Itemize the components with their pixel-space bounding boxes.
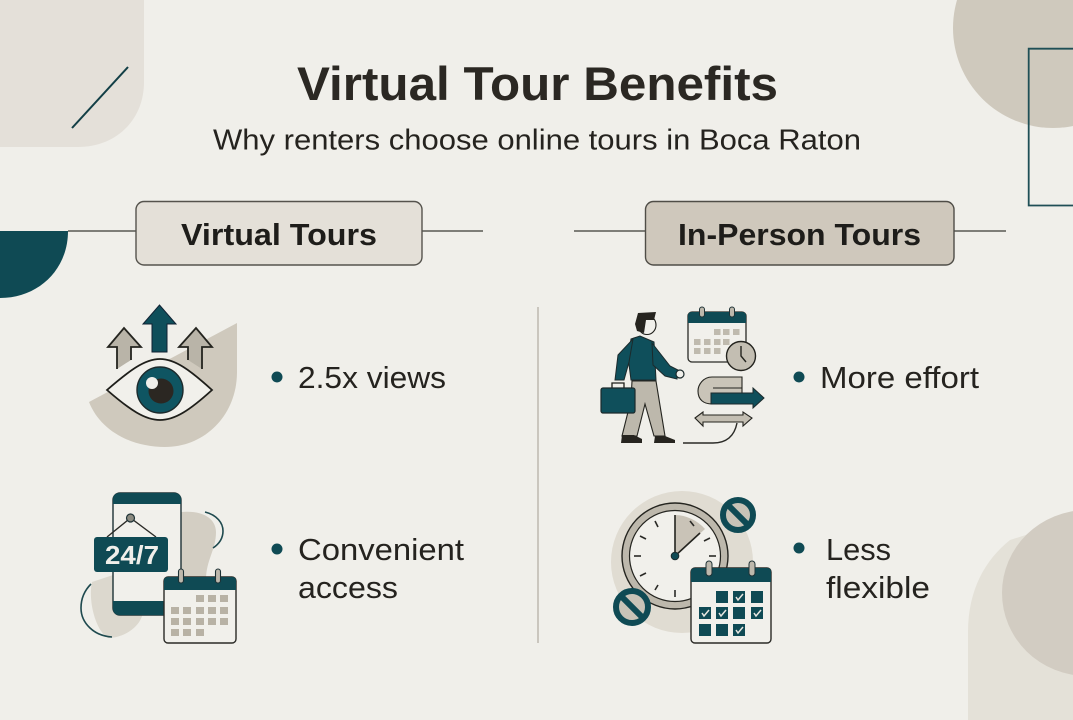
- icon: clock with no-symbols and calendar: [611, 491, 771, 643]
- bullet: Less flexible: Less: [826, 532, 891, 567]
- decorative shape: bottom right arch and circle: [968, 510, 1073, 720]
- subtitle: Why renters choose online tours in Boca Raton: [213, 124, 861, 156]
- icon: phone with 24/7 sign and calendar: [81, 493, 236, 643]
- bullet: 2.5x views: 2.5x views: [298, 360, 446, 395]
- decorative shape: top left panel: [0, 0, 144, 147]
- bullet: Convenient access: [272, 532, 464, 605]
- heading: Virtual Tours: Virtual Tours: [181, 217, 377, 252]
- icon: walking person with calendar, clock and arrows: [601, 307, 764, 443]
- bullet: More effort: More effort: [820, 360, 979, 395]
- center divider: [537, 307, 539, 643]
- decorative shape: teal quarter circle: [0, 231, 68, 298]
- title: Virtual Tour Benefits: [297, 57, 778, 110]
- decorative shape: top right circle and outline: [953, 0, 1073, 206]
- bullet: Convenient access: access: [298, 570, 398, 605]
- heading: In-Person Tours: In-Person Tours: [678, 217, 921, 252]
- bullet: Convenient access: Convenient: [298, 532, 464, 567]
- bullet: Less flexible: [794, 532, 930, 605]
- icon: phone with 24/7 sign and calendar: 24/7: [105, 540, 159, 570]
- heading: Virtual Tours: [68, 202, 483, 265]
- icon: eye with up arrows: [89, 305, 237, 447]
- bullet: Less flexible: flexible: [826, 570, 930, 605]
- heading: In-Person Tours: [574, 202, 1006, 265]
